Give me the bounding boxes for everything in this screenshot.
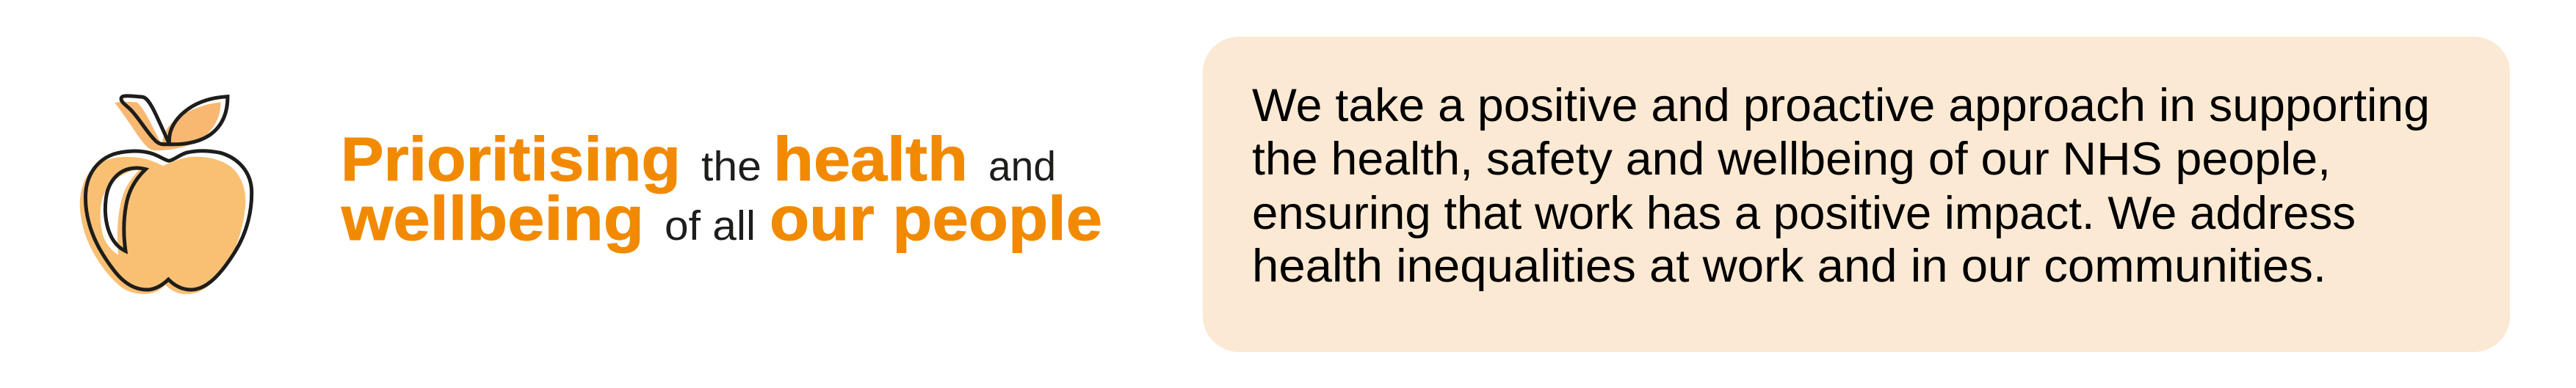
panel text: ensuring that work has a positive impact. We address <box>1252 188 2356 239</box>
panel text: the health, safety and wellbeing of our NHS people, <box>1252 133 2331 185</box>
panel text: health inequalities at work and in our communities. <box>1252 241 2326 292</box>
panel background <box>1203 37 2510 352</box>
heading line 1: health <box>773 125 968 194</box>
heading line 2: our people <box>770 184 1102 253</box>
heading line 1: Prioritising <box>341 125 681 194</box>
heading line 1: and <box>988 143 1056 190</box>
panel: description <box>1203 37 2510 352</box>
heading <box>341 125 1102 253</box>
leaf fill <box>115 102 221 150</box>
panel text: We take a positive and proactive approach in supporting <box>1252 80 2430 131</box>
heading line 2: wellbeing <box>341 184 644 253</box>
apple body fill <box>80 157 245 294</box>
heading line 1: the <box>701 143 761 190</box>
heading line 1 <box>341 125 1056 194</box>
heading line 2: of all <box>665 202 756 249</box>
icon: apple <box>80 96 252 294</box>
heading line 2 <box>341 184 1102 253</box>
panel text <box>1252 80 2430 292</box>
apple highlight <box>101 170 140 255</box>
apple outlines <box>85 96 252 290</box>
